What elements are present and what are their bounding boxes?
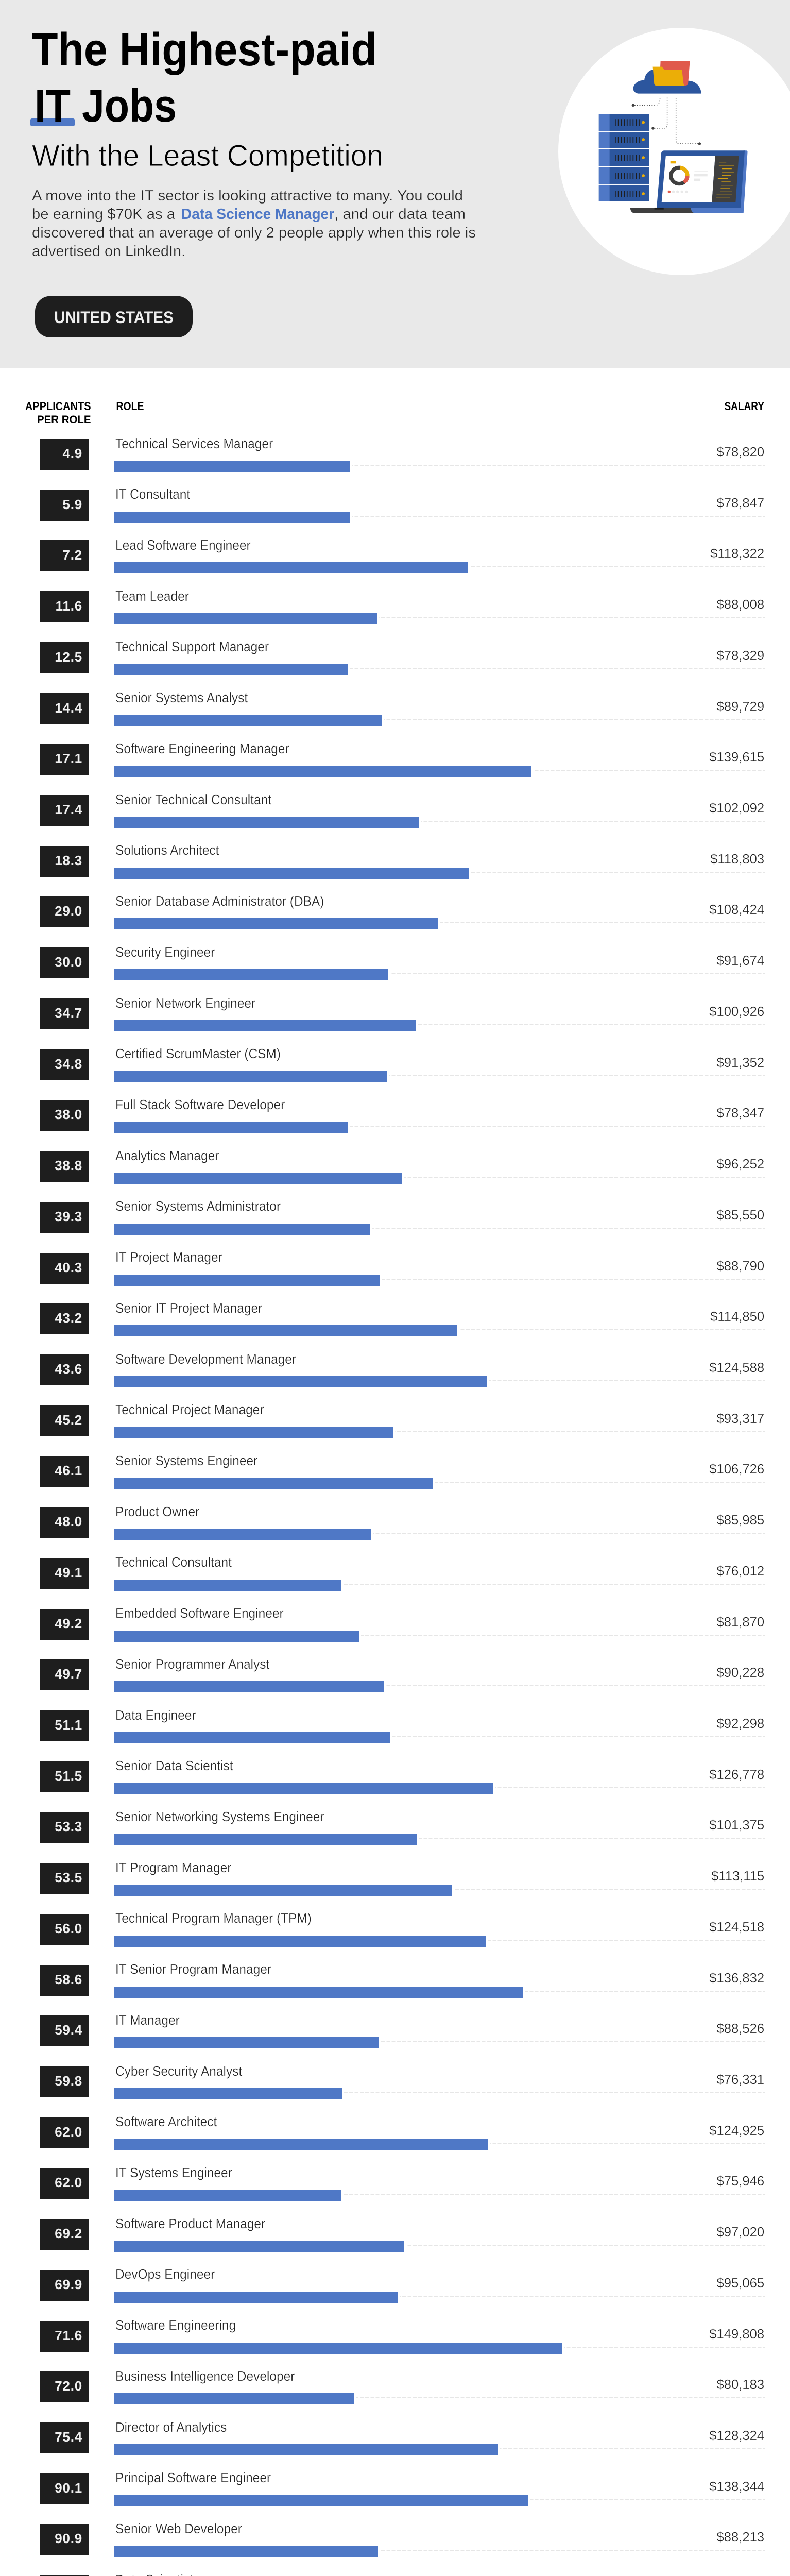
row: Senior Programmer Analyst: $90,228: [716, 1665, 764, 1680]
row: Senior Systems Administrator: [0, 1202, 790, 1253]
row: IT Program Manager: 53.5: [55, 1870, 82, 1885]
row: Cyber Security Analyst: Cyber Security Analyst: [115, 2064, 242, 2079]
row: Senior Systems Engineer: [0, 1456, 790, 1507]
row: Senior Technical Consultant: [0, 795, 790, 846]
row: Technical Project Manager: [0, 1405, 790, 1456]
row: Business Intelligence Developer: $80,183: [716, 2377, 764, 2392]
row: Technical Project Manager: $93,317: [716, 1411, 764, 1426]
row: Technical Program Manager (TPM): Technical Program Manager (TPM): [115, 1911, 312, 1926]
row: Software Engineering Manager: Software Engineering Manager: [115, 742, 289, 756]
row: DevOps Engineer: 69.9: [55, 2277, 82, 2292]
row: Business Intelligence Developer: [0, 2371, 790, 2422]
row: IT Manager: IT Manager: [115, 2013, 180, 2028]
icon: laptop: [630, 150, 748, 213]
row: Technical Program Manager (TPM): 56.0: [55, 1921, 82, 1936]
row: Solutions Architect: 18.3: [55, 853, 82, 868]
row: Senior Web Developer: [0, 2524, 790, 2575]
row: Data Engineer: Data Engineer: [115, 1708, 196, 1723]
column headings: [25, 400, 764, 426]
row: Analytics Manager: 38.8: [55, 1158, 82, 1173]
row: Software Development Manager: [0, 1354, 790, 1405]
row: Lead Software Engineer: [0, 540, 790, 591]
row: IT Project Manager: IT Project Manager: [115, 1250, 222, 1265]
row: Senior Data Scientist: $126,778: [709, 1767, 764, 1782]
icon: cloud with folder: [633, 61, 701, 94]
row: Senior Data Scientist: [0, 1761, 790, 1812]
row: Technical Program Manager (TPM): [0, 1914, 790, 1965]
row: Full Stack Software Developer: Full Stack Software Developer: [115, 1098, 285, 1112]
row: DevOps Engineer: $95,065: [716, 2275, 764, 2291]
row: Business Intelligence Developer: Business Intelligence Developer: [115, 2369, 295, 2384]
row: Senior Systems Administrator: 39.3: [55, 1209, 82, 1224]
row: IT Program Manager: IT Program Manager: [115, 1861, 231, 1875]
row: Senior Systems Engineer: $106,726: [709, 1461, 764, 1477]
icon: server rack: [599, 114, 649, 201]
row: Senior Networking Systems Engineer: [0, 1812, 790, 1863]
row: Analytics Manager: Analytics Manager: [115, 1149, 219, 1163]
row: DevOps Engineer: DevOps Engineer: [115, 2267, 215, 2282]
row: IT Senior Program Manager: IT Senior Program Manager: [115, 1962, 271, 1977]
row: Security Engineer: [0, 947, 790, 998]
row: Solutions Architect: $118,803: [710, 851, 764, 867]
row: Technical Consultant: 49.1: [55, 1565, 82, 1580]
row: IT Consultant: 5.9: [62, 497, 82, 512]
row: Technical Services Manager: Technical Services Manager: [115, 437, 273, 451]
row: Security Engineer: Security Engineer: [115, 945, 215, 960]
row: IT Senior Program Manager: 58.6: [55, 1972, 82, 1987]
header background panel: [0, 0, 790, 368]
row: Certified ScrumMaster (CSM): Certified ScrumMaster (CSM): [115, 1047, 281, 1061]
row: Security Engineer: $91,674: [716, 953, 764, 968]
row: Certified ScrumMaster (CSM): [0, 1049, 790, 1100]
row: Software Product Manager: $97,020: [716, 2224, 764, 2240]
row: IT Consultant: $78,847: [716, 495, 764, 511]
row: Technical Consultant: Technical Consultant: [115, 1555, 232, 1570]
row: Senior Database Administrator (DBA): $108,424: [709, 902, 764, 917]
subtitle: With the Least Competition: [32, 139, 383, 173]
heading: applicants per role: [25, 400, 91, 426]
row: Team Leader: [0, 591, 790, 642]
row: IT Manager: 59.4: [55, 2022, 82, 2038]
row: Senior Database Administrator (DBA): Senior Database Administrator (DBA): [115, 894, 324, 909]
row: Senior Network Engineer: Senior Network Engineer: [115, 996, 255, 1011]
row: Lead Software Engineer: $118,322: [710, 546, 764, 561]
row: Software Product Manager: Software Product Manager: [115, 2217, 265, 2231]
row: Embedded Software Engineer: 49.2: [55, 1616, 82, 1631]
row: Solutions Architect: [0, 846, 790, 896]
row: Senior Technical Consultant: 17.4: [55, 802, 82, 817]
row: Lead Software Engineer: Lead Software Engineer: [115, 538, 251, 553]
row: Senior Systems Administrator: $85,550: [716, 1207, 764, 1223]
country badge: UNITED STATES: [54, 308, 174, 327]
row: Senior Systems Analyst: Senior Systems Analyst: [115, 691, 248, 705]
intro paragraph: discovered that an average of only 2 people apply when this role is: [32, 225, 476, 241]
row: Software Engineering: Software Engineering: [115, 2318, 236, 2333]
row: Senior Network Engineer: [0, 998, 790, 1049]
row: Team Leader: $88,008: [716, 597, 764, 612]
illustration circle: [558, 28, 790, 275]
row: Software Engineering: [0, 2321, 790, 2371]
row: Software Engineering Manager: 17.1: [55, 751, 82, 766]
row: Software Architect: $124,925: [709, 2123, 764, 2138]
row: Senior Data Scientist: 51.5: [55, 1768, 82, 1784]
heading: applicants per role: APPLICANTS: [25, 400, 91, 413]
row: Senior IT Project Manager: Senior IT Project Manager: [115, 1301, 262, 1316]
row: Software Engineering: 71.6: [55, 2328, 82, 2343]
row: Cyber Security Analyst: [0, 2066, 790, 2117]
row: Full Stack Software Developer: [0, 1100, 790, 1151]
row: Director of Analytics: Director of Analytics: [115, 2420, 227, 2435]
row: Senior Systems Engineer: 46.1: [55, 1463, 82, 1478]
row: Solutions Architect: Solutions Architect: [115, 843, 219, 858]
row: Team Leader: 11.6: [56, 598, 82, 614]
row: Product Owner: [0, 1507, 790, 1558]
row: Business Intelligence Developer: 72.0: [55, 2378, 82, 2394]
row: Certified ScrumMaster (CSM): 34.8: [55, 1056, 82, 1072]
intro paragraph: [32, 188, 476, 260]
row: Senior Database Administrator (DBA): [0, 896, 790, 947]
row: Principal Software Engineer: [0, 2473, 790, 2524]
intro paragraph: advertised on LinkedIn.: [32, 243, 185, 260]
row: Senior Networking Systems Engineer: $101,375: [709, 1817, 764, 1833]
row: IT Systems Engineer: IT Systems Engineer: [115, 2166, 232, 2180]
row: Director of Analytics: [0, 2422, 790, 2473]
row: Software Engineering Manager: $139,615: [709, 749, 764, 765]
row: Senior Network Engineer: 34.7: [55, 1005, 82, 1021]
row: Full Stack Software Developer: $78,347: [716, 1105, 764, 1121]
row: Embedded Software Engineer: $81,870: [716, 1614, 764, 1630]
title: IT Jobs: [35, 80, 177, 132]
row: Principal Software Engineer: Principal Software Engineer: [115, 2471, 271, 2485]
heading: applicants per role: PER ROLE: [37, 413, 91, 426]
row: IT Systems Engineer: $75,946: [716, 2173, 764, 2189]
row: IT Manager: [0, 2015, 790, 2066]
title: [30, 24, 377, 132]
row: Software Architect: Software Architect: [115, 2115, 217, 2129]
row: IT Systems Engineer: [0, 2168, 790, 2219]
row: IT Program Manager: [0, 1863, 790, 1914]
row: Senior Systems Engineer: Senior Systems Engineer: [115, 1454, 257, 1468]
row: Senior Systems Analyst: $89,729: [716, 699, 764, 714]
row: Senior Systems Analyst: [0, 693, 790, 744]
row: Technical Consultant: [0, 1558, 790, 1609]
row: Senior Technical Consultant: Senior Technical Consultant: [115, 793, 271, 807]
row: Software Engineering Manager: [0, 744, 790, 795]
row: IT Program Manager: $113,115: [711, 1868, 764, 1884]
row: Full Stack Software Developer: 38.0: [55, 1107, 82, 1122]
row: Certified ScrumMaster (CSM): $91,352: [716, 1055, 764, 1070]
row: Senior IT Project Manager: 43.2: [55, 1310, 82, 1326]
row: Principal Software Engineer: 90.1: [55, 2480, 82, 2496]
row: Technical Consultant: $76,012: [716, 1563, 764, 1579]
row: Technical Support Manager: 12.5: [55, 649, 82, 665]
row: Senior Networking Systems Engineer: Senior Networking Systems Engineer: [115, 1810, 324, 1824]
heading: role: ROLE: [116, 400, 144, 413]
row: Senior Web Developer: $88,213: [716, 2529, 764, 2545]
heading: salary: SALARY: [724, 400, 764, 413]
row: IT Project Manager: $88,790: [716, 1258, 764, 1274]
row: Senior Web Developer: 90.9: [55, 2531, 82, 2546]
row: Software Engineering: $149,808: [709, 2326, 764, 2342]
row: Director of Analytics: $128,324: [709, 2428, 764, 2443]
row: Product Owner: $85,985: [716, 1512, 764, 1528]
row: Senior IT Project Manager: $114,850: [710, 1309, 764, 1324]
intro paragraph: Data Science Manager: [181, 206, 334, 223]
row: Senior Programmer Analyst: Senior Programmer Analyst: [115, 1657, 269, 1672]
row: Product Owner: Product Owner: [115, 1505, 199, 1519]
row: Analytics Manager: [0, 1151, 790, 1202]
row: IT Senior Program Manager: [0, 1965, 790, 2015]
row: Senior Systems Analyst: 14.4: [55, 700, 82, 716]
intro paragraph: , and our data team: [334, 206, 466, 223]
row: Senior Programmer Analyst: [0, 1659, 790, 1710]
row: Technical Services Manager: $78,820: [716, 444, 764, 460]
row: Technical Support Manager: Technical Support Manager: [115, 640, 269, 654]
row: Senior Network Engineer: $100,926: [709, 1004, 764, 1019]
row: Technical Program Manager (TPM): $124,518: [709, 1919, 764, 1935]
illustration: cloud, servers and laptop: [599, 61, 748, 213]
row: Data Engineer: [0, 1710, 790, 1761]
row: Software Development Manager: Software Development Manager: [115, 1352, 296, 1367]
row: IT Senior Program Manager: $136,832: [709, 1970, 764, 1986]
row: Senior Database Administrator (DBA): 29.0: [55, 903, 82, 919]
row: Software Product Manager: 69.2: [55, 2226, 82, 2241]
row: Cyber Security Analyst: 59.8: [55, 2073, 82, 2089]
row: Software Product Manager: [0, 2219, 790, 2270]
intro paragraph: A move into the IT sector is looking attractive to many. You could: [32, 188, 463, 204]
row: Technical Support Manager: $78,329: [716, 648, 764, 663]
row: Data Engineer: 51.1: [55, 1717, 82, 1733]
row: Director of Analytics: 75.4: [55, 2429, 82, 2445]
header graphics and text: [30, 24, 790, 337]
country badge: [35, 296, 193, 337]
row: Technical Services Manager: 4.9: [62, 446, 82, 461]
row: IT Consultant: [0, 490, 790, 540]
row: Senior IT Project Manager: [0, 1303, 790, 1354]
row: Embedded Software Engineer: Embedded Software Engineer: [115, 1606, 284, 1621]
row: Software Development Manager: $124,588: [709, 1360, 764, 1375]
row: Senior Programmer Analyst: 49.7: [55, 1666, 82, 1682]
row: IT Project Manager: 40.3: [55, 1259, 82, 1275]
row: Software Architect: 62.0: [55, 2124, 82, 2140]
row: Team Leader: Team Leader: [115, 589, 189, 604]
row: Technical Services Manager: [0, 439, 790, 490]
row: Technical Support Manager: [0, 642, 790, 693]
row: IT Consultant: IT Consultant: [115, 487, 190, 502]
row: Principal Software Engineer: $138,344: [709, 2479, 764, 2494]
row: Senior Web Developer: Senior Web Developer: [115, 2522, 242, 2536]
row: Senior Networking Systems Engineer: 53.3: [55, 1819, 82, 1834]
row: IT Systems Engineer: 62.0: [55, 2175, 82, 2190]
row: Technical Project Manager: 45.2: [55, 1412, 82, 1428]
intro paragraph: be earning $70K as a: [32, 206, 176, 223]
row: Software Development Manager: 43.6: [55, 1361, 82, 1377]
row: Software Architect: [0, 2117, 790, 2168]
row: Senior Systems Administrator: Senior Systems Administrator: [115, 1199, 281, 1214]
row: Data Engineer: $92,298: [716, 1716, 764, 1731]
row: Cyber Security Analyst: $76,331: [716, 2072, 764, 2087]
row: IT Project Manager: [0, 1253, 790, 1303]
connector dots: [632, 104, 701, 145]
row: Lead Software Engineer: 7.2: [62, 547, 82, 563]
row: Analytics Manager: $96,252: [716, 1156, 764, 1172]
title: The Highest-paid: [32, 24, 377, 76]
connector lines: [634, 96, 698, 144]
row: Security Engineer: 30.0: [55, 954, 82, 970]
row: Senior Technical Consultant: $102,092: [709, 800, 764, 816]
row: IT Manager: $88,526: [716, 2021, 764, 2036]
row: Embedded Software Engineer: [0, 1609, 790, 1659]
row: Senior Data Scientist: Senior Data Scientist: [115, 1759, 233, 1773]
row: Product Owner: 48.0: [55, 1514, 82, 1529]
row: Technical Project Manager: Technical Project Manager: [115, 1403, 264, 1417]
row: DevOps Engineer: [0, 2270, 790, 2321]
